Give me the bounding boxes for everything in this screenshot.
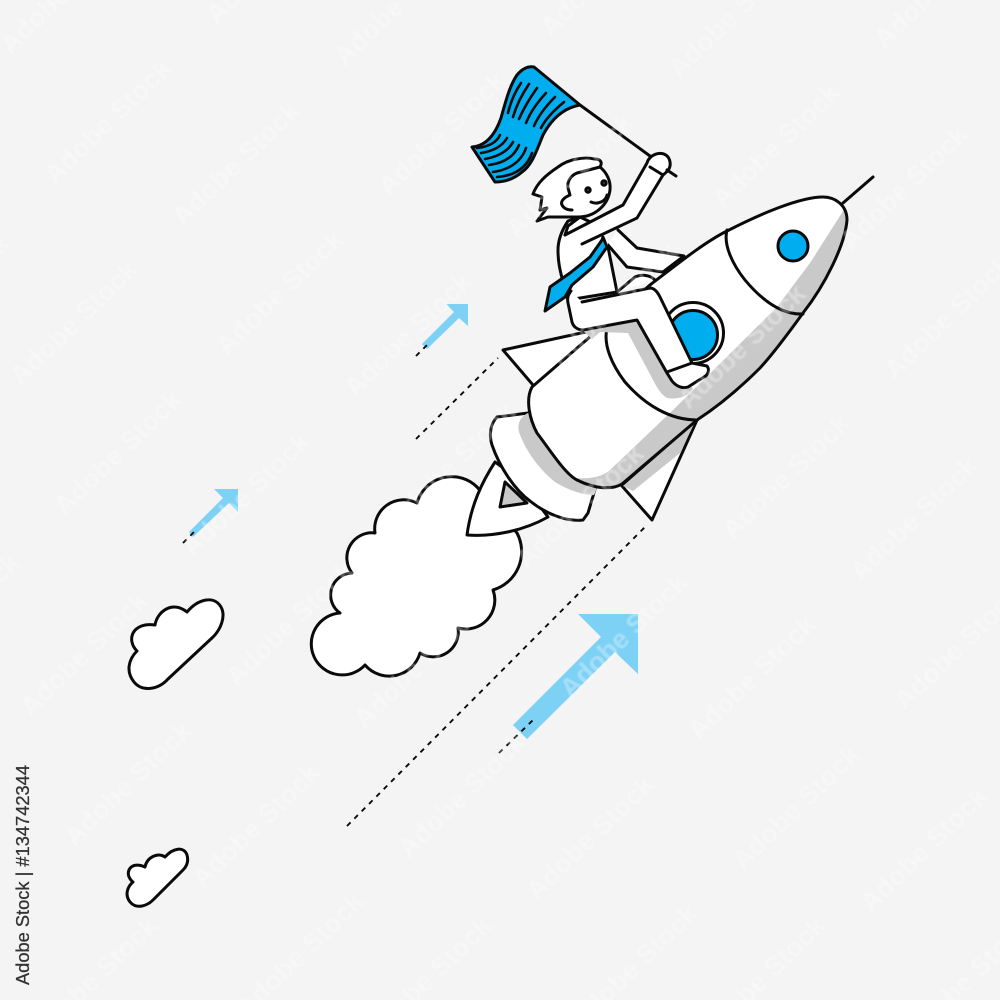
cockpit line	[606, 328, 697, 420]
watermark pattern: Adobe Stock	[726, 739, 866, 876]
watermark pattern: Adobe Stock	[392, 727, 532, 864]
wrist line	[650, 167, 663, 175]
speed lines: dashed	[183, 344, 645, 826]
flag upper stripes	[508, 83, 564, 128]
near leg	[568, 288, 708, 388]
watermark pattern: Adobe Stock	[4, 254, 144, 391]
watermark pattern: Adobe Stock	[682, 609, 822, 746]
watermark pattern: Adobe Stock	[844, 450, 984, 587]
watermark pattern: Adobe Stock	[834, 119, 974, 256]
rocket body	[529, 197, 847, 488]
body outline	[529, 197, 847, 488]
watermark pattern: Adobe Stock	[38, 53, 178, 190]
watermark pattern: Adobe Stock	[348, 597, 488, 734]
porthole glass	[668, 310, 718, 360]
watermark pattern: Adobe Stock	[510, 438, 650, 575]
cloud: large exhaust	[311, 477, 522, 676]
collar	[565, 217, 580, 235]
eye right	[602, 181, 606, 185]
far arm behind rocket	[608, 230, 684, 272]
smile	[591, 195, 607, 203]
watermark pattern: Adobe Stock	[554, 567, 694, 704]
antenna	[843, 177, 873, 203]
watermark pattern: Adobe Stock	[854, 781, 994, 918]
watermark pattern: Adobe Stock	[544, 236, 684, 373]
top fin	[503, 330, 595, 385]
cloud: small	[127, 849, 188, 906]
pole end	[667, 170, 676, 176]
leg shadow on rocket	[583, 318, 693, 398]
porthole ring	[662, 302, 724, 364]
rocket	[467, 177, 873, 535]
nozzle	[467, 462, 548, 535]
watermark pattern: Adobe Stock	[672, 278, 812, 415]
watermark pattern: Adobe Stock	[382, 396, 522, 533]
torso	[558, 217, 617, 300]
watermark pattern: Adobe Stock	[500, 107, 640, 244]
watermark pattern: Adobe Stock	[372, 65, 512, 202]
watermark pattern: Adobe Stock	[14, 585, 154, 722]
tie	[545, 237, 607, 311]
hair front and face edge	[562, 167, 600, 210]
watermark pattern: Adobe Stock	[186, 757, 326, 894]
watermark pattern: Adobe Stock	[338, 266, 478, 403]
watermark pattern: Adobe Stock	[706, 77, 846, 214]
bottom fin	[622, 420, 697, 520]
watermark pattern: Adobe Stock	[166, 95, 306, 232]
flag	[472, 67, 580, 182]
arrow: large blue	[513, 614, 638, 739]
eye left	[586, 188, 590, 192]
hair and head	[533, 158, 610, 221]
watermark pattern: Adobe Stock	[58, 715, 198, 852]
shoe line	[667, 363, 692, 372]
watermark pattern: Adobe Stock	[220, 555, 360, 692]
arrow: small blue	[189, 489, 238, 537]
infographic: businessman riding a rocket	[15, 65, 875, 986]
watermark pattern: Adobe Stock	[520, 769, 660, 906]
nozzle inner shade	[500, 482, 527, 507]
watermark pattern: Adobe Stock	[176, 426, 316, 563]
flag cloth	[472, 67, 580, 182]
engine shade	[518, 413, 600, 495]
body shade	[576, 210, 846, 486]
arrow: medium blue	[422, 304, 468, 349]
raised arm	[565, 153, 670, 244]
engine section	[490, 413, 596, 520]
watermark pattern: Adobe Stock	[48, 384, 188, 521]
flag pole	[580, 105, 650, 156]
flag lower stripes	[477, 135, 532, 177]
cloud: medium	[129, 600, 223, 688]
stock id text: Adobe Stock | #134742344	[13, 765, 33, 985]
far leg behind rocket	[617, 275, 655, 292]
nose window	[778, 231, 808, 261]
watermark pattern: Adobe Stock	[716, 408, 856, 545]
nose cone line	[726, 230, 803, 314]
businessman	[533, 105, 708, 388]
watermark pattern: Adobe Stock	[210, 224, 350, 361]
bottom fin shade	[623, 424, 694, 491]
